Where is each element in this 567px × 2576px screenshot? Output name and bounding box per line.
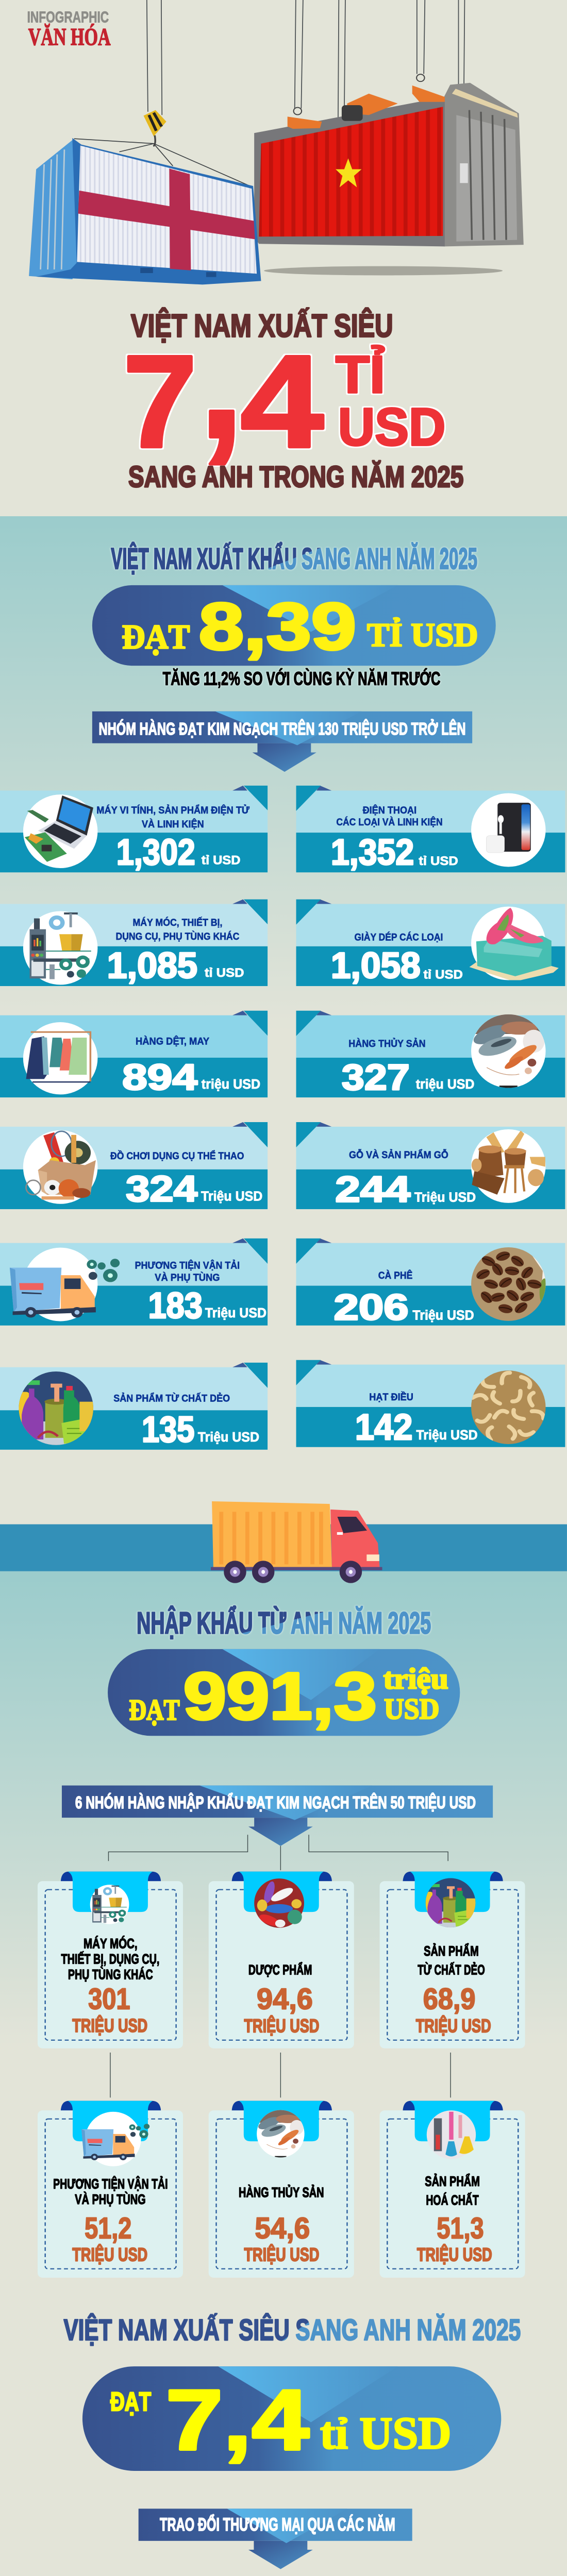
card: máy móc xyxy=(0,900,268,986)
pill: 8,39 tỉ USD: ĐẠT xyxy=(122,618,190,656)
card: hạt điều xyxy=(296,1360,565,1447)
icon: laptop and circuit board xyxy=(23,794,97,868)
big figure 7,4: 4 xyxy=(240,328,325,475)
card: máy móc nhập khẩu: THIẾT BỊ, DỤNG CỤ, xyxy=(61,1951,159,1967)
pill: 8,39 tỉ USD xyxy=(92,585,496,666)
card: dược phẩm: 94,6 xyxy=(257,1982,313,2015)
card: máy vi tính: MÁY VI TÍNH, SẢN PHẨM ĐIỆN TỬ xyxy=(96,804,250,816)
card: cà phê: CÀ PHÊ xyxy=(378,1269,413,1281)
card: hàng thủy sản nhập khẩu: TRIỆU USD xyxy=(244,2244,319,2265)
card: sản phẩm từ chất dẻo nhập khẩu: TỪ CHẤT DẺO xyxy=(418,1962,485,1977)
card: máy móc nhập khẩu: MÁY MÓC, xyxy=(84,1936,138,1951)
card: phương tiện vận tải nhập khẩu: VÀ PHỤ TÙNG xyxy=(75,2192,146,2207)
card: đồ chơi: 324 xyxy=(126,1168,197,1209)
banner: 6 nhóm hàng xyxy=(62,1786,493,1846)
card: hàng thủy sản: 327 xyxy=(342,1057,410,1097)
unit: tỉ USD: TỈ xyxy=(336,345,385,404)
card: máy vi tính: tỉ USD xyxy=(202,853,240,867)
card: giày dép xyxy=(296,900,565,986)
card: dược phẩm: TRIỆU USD xyxy=(244,2015,319,2036)
panel: export heading xyxy=(0,542,565,986)
card: phương tiện vận tải: PHƯƠNG TIỆN VẬN TẢI xyxy=(135,1259,240,1271)
icon: plastic products xyxy=(426,1878,476,1927)
card: giày dép: GIÀY DÉP CÁC LOẠI xyxy=(354,931,443,943)
panel: import row two and surplus xyxy=(38,2053,525,2569)
card: điện thoại: ĐIỆN THOẠI xyxy=(363,804,416,816)
big figure 7,4 xyxy=(123,280,325,475)
card: sản phẩm từ chất dẻo nhập khẩu: SẢN PHẨM xyxy=(424,1943,479,1959)
band: section divider xyxy=(0,1524,567,1571)
card: hàng thủy sản nhập khẩu: 54,6 xyxy=(255,2211,310,2245)
icon: chemistry flasks xyxy=(427,2110,476,2159)
panel: hero header xyxy=(27,0,524,494)
banner: trao đổi thương mại: TRAO ĐỔI THƯƠNG MẠI QUA CÁC NĂM xyxy=(160,2514,395,2535)
panel: import section xyxy=(38,1605,525,2048)
banner: trao đổi thương mại xyxy=(139,2509,412,2569)
pill: 7,4 tỉ USD: ĐẠT xyxy=(110,2387,151,2417)
card: máy móc: DỤNG CỤ, PHỤ TÙNG KHÁC xyxy=(115,930,239,942)
icon: sports box xyxy=(23,1130,97,1204)
icon: truck xyxy=(81,2112,149,2166)
icon: machinery xyxy=(90,1885,129,1924)
card: hàng thủy sản nhập khẩu: HÀNG THỦY SẢN xyxy=(239,2184,324,2200)
card: sản phẩm từ chất dẻo nhập khẩu: 68,9 xyxy=(423,1982,475,2015)
card: máy móc: MÁY MÓC, THIẾT BỊ, xyxy=(132,917,222,928)
pill: 8,39 tỉ USD: 8,39 xyxy=(199,589,356,664)
card: đồ chơi xyxy=(0,1122,268,1209)
card: gỗ xyxy=(296,1122,565,1210)
card: hàng thủy sản xyxy=(296,1011,565,1097)
card: phương tiện vận tải xyxy=(0,1239,268,1326)
big figure 7,4: 7 xyxy=(123,328,197,475)
card: phương tiện vận tải: Triệu USD xyxy=(205,1306,266,1320)
card: sản phẩm từ chất dẻo: 135 xyxy=(142,1409,194,1450)
icon: shoes on box xyxy=(470,907,559,980)
icon: coffee beans xyxy=(471,1247,549,1321)
card: đồ chơi: ĐỒ CHƠI DỤNG CỤ THỂ THAO xyxy=(110,1150,244,1162)
card: máy móc nhập khẩu: TRIỆU USD xyxy=(72,2015,147,2036)
card: gỗ: 244 xyxy=(335,1169,410,1210)
icon: delivery truck and gears xyxy=(10,1248,120,1321)
pill: 991,3 triệu USD: triệu xyxy=(383,1663,448,1696)
card: máy vi tính xyxy=(0,786,268,872)
card: hoá chất xyxy=(380,2101,525,2278)
icon: crane hook xyxy=(143,110,166,146)
banner: nhóm hàng trên 130 triệu USD xyxy=(92,711,472,772)
pill: 991,3 triệu USD: USD xyxy=(384,1693,439,1725)
title line 1: VIỆT NAM XUẤT SIÊU xyxy=(131,308,393,344)
pill: 991,3 triệu USD: 991,3 xyxy=(184,1659,377,1733)
card: hoá chất: TRIỆU USD xyxy=(417,2244,492,2265)
unit: tỉ USD xyxy=(336,345,445,457)
pill: 991,3 triệu USD xyxy=(108,1649,460,1736)
container: England flag xyxy=(29,138,261,284)
card: hoá chất: 51,3 xyxy=(437,2211,484,2245)
card: hàng dệt may: triệu USD xyxy=(202,1077,260,1092)
card: hàng thủy sản nhập khẩu xyxy=(209,2101,354,2278)
card: hạt điều: 142 xyxy=(355,1406,412,1447)
card: điện thoại xyxy=(296,786,565,872)
shadow under containers xyxy=(264,266,503,275)
card: máy móc: 1,085 xyxy=(107,945,197,986)
card: hạt điều: Triệu USD xyxy=(416,1428,478,1443)
icon: plastic products xyxy=(19,1371,94,1445)
card: sản phẩm từ chất dẻo xyxy=(0,1363,268,1450)
icon: cashew nuts xyxy=(471,1370,546,1444)
card: dược phẩm: DƯỢC PHẨM xyxy=(248,1962,312,1977)
icon: wood logs xyxy=(471,1129,546,1203)
card: cà phê xyxy=(296,1239,565,1327)
card: máy móc nhập khẩu xyxy=(38,1872,183,2048)
pill: 7,4 tỉ USD: 7,4 xyxy=(165,2372,309,2468)
card: hoá chất: HOÁ CHẤT xyxy=(426,2193,479,2208)
pill: 991,3 triệu USD: ĐẠT xyxy=(129,1694,180,1726)
pill: 8,39 tỉ USD: TỈ USD xyxy=(367,616,478,653)
card: hàng dệt may: HÀNG DỆT, MAY xyxy=(136,1035,209,1047)
card: máy vi tính: 1,302 xyxy=(116,832,195,872)
card: phương tiện vận tải nhập khẩu: PHƯƠNG TIỆN VẬN TẢI xyxy=(53,2176,168,2192)
card: giày dép: tỉ USD xyxy=(423,968,463,981)
card: đồ chơi: Triệu USD xyxy=(201,1189,262,1204)
card: phương tiện vận tải nhập khẩu xyxy=(38,2101,183,2278)
logo: Infographic Văn Hóa xyxy=(27,8,111,50)
icon: cargo truck xyxy=(211,1501,382,1583)
card: hàng dệt may xyxy=(0,1011,268,1097)
pill: 7,4 tỉ USD xyxy=(82,2366,501,2471)
pill: 7,4 tỉ USD: tỉ USD xyxy=(320,2409,451,2459)
card: phương tiện vận tải nhập khẩu: 51,2 xyxy=(85,2211,131,2245)
logo: Infographic Văn Hóa: VĂN HÓA xyxy=(28,24,111,50)
card: máy móc nhập khẩu: PHỤ TÙNG KHÁC xyxy=(68,1967,153,1982)
connector lines xyxy=(110,2053,451,2097)
card: máy móc: tỉ USD xyxy=(205,966,244,980)
icon: seafood xyxy=(471,1014,546,1088)
card: phương tiện vận tải: VÀ PHỤ TÙNG xyxy=(155,1272,220,1283)
card: hàng thủy sản: triệu USD xyxy=(416,1077,474,1092)
card: gỗ: Triệu USD xyxy=(414,1190,476,1205)
card: sản phẩm từ chất dẻo: Triệu USD xyxy=(198,1430,259,1445)
card: phương tiện vận tải: 183 xyxy=(148,1285,203,1326)
card: máy vi tính: VÀ LINH KIỆN xyxy=(142,818,204,830)
card: dược phẩm xyxy=(209,1872,354,2048)
unit: tỉ USD: USD xyxy=(338,398,445,457)
card: hạt điều: HẠT ĐIỀU xyxy=(369,1392,413,1403)
crane ropes xyxy=(147,0,464,118)
big figure 7,4: , xyxy=(199,280,244,474)
icon: clothes rack xyxy=(23,1022,97,1094)
card: điện thoại: 1,352 xyxy=(331,832,414,872)
icon: pills photo xyxy=(254,1878,304,1928)
card: hoá chất: SẢN PHẨM xyxy=(425,2173,480,2189)
card: hàng dệt may: 894 xyxy=(122,1057,197,1097)
card: gỗ: GỖ VÀ SẢN PHẨM GỖ xyxy=(349,1149,448,1161)
logo: Infographic Văn Hóa: INFOGRAPHIC xyxy=(27,8,109,26)
card: hàng thủy sản: HÀNG THỦY SẢN xyxy=(348,1038,426,1049)
connector lines xyxy=(108,1835,448,1870)
container: Vietnam flag xyxy=(254,74,524,246)
card: sản phẩm từ chất dẻo: SẢN PHẨM TỪ CHẤT DẺO xyxy=(113,1393,230,1404)
icon: machinery xyxy=(23,911,97,985)
card: sản phẩm từ chất dẻo nhập khẩu xyxy=(380,1872,525,2048)
icon: seafood xyxy=(256,2110,305,2158)
card: cà phê: 206 xyxy=(333,1287,409,1327)
card: giày dép: 1,058 xyxy=(331,945,421,986)
card: điện thoại: tỉ USD xyxy=(419,854,458,868)
panel: export cards lower xyxy=(0,1011,567,1583)
card: cà phê: Triệu USD xyxy=(412,1308,474,1323)
icon: smartphone and earbuds xyxy=(471,793,546,867)
card: phương tiện vận tải nhập khẩu: TRIỆU USD xyxy=(72,2244,147,2265)
card: máy móc nhập khẩu: 301 xyxy=(88,1982,130,2015)
card: sản phẩm từ chất dẻo nhập khẩu: TRIỆU USD xyxy=(416,2015,491,2036)
card: điện thoại: CÁC LOẠI VÀ LINH KIỆN xyxy=(336,816,443,828)
